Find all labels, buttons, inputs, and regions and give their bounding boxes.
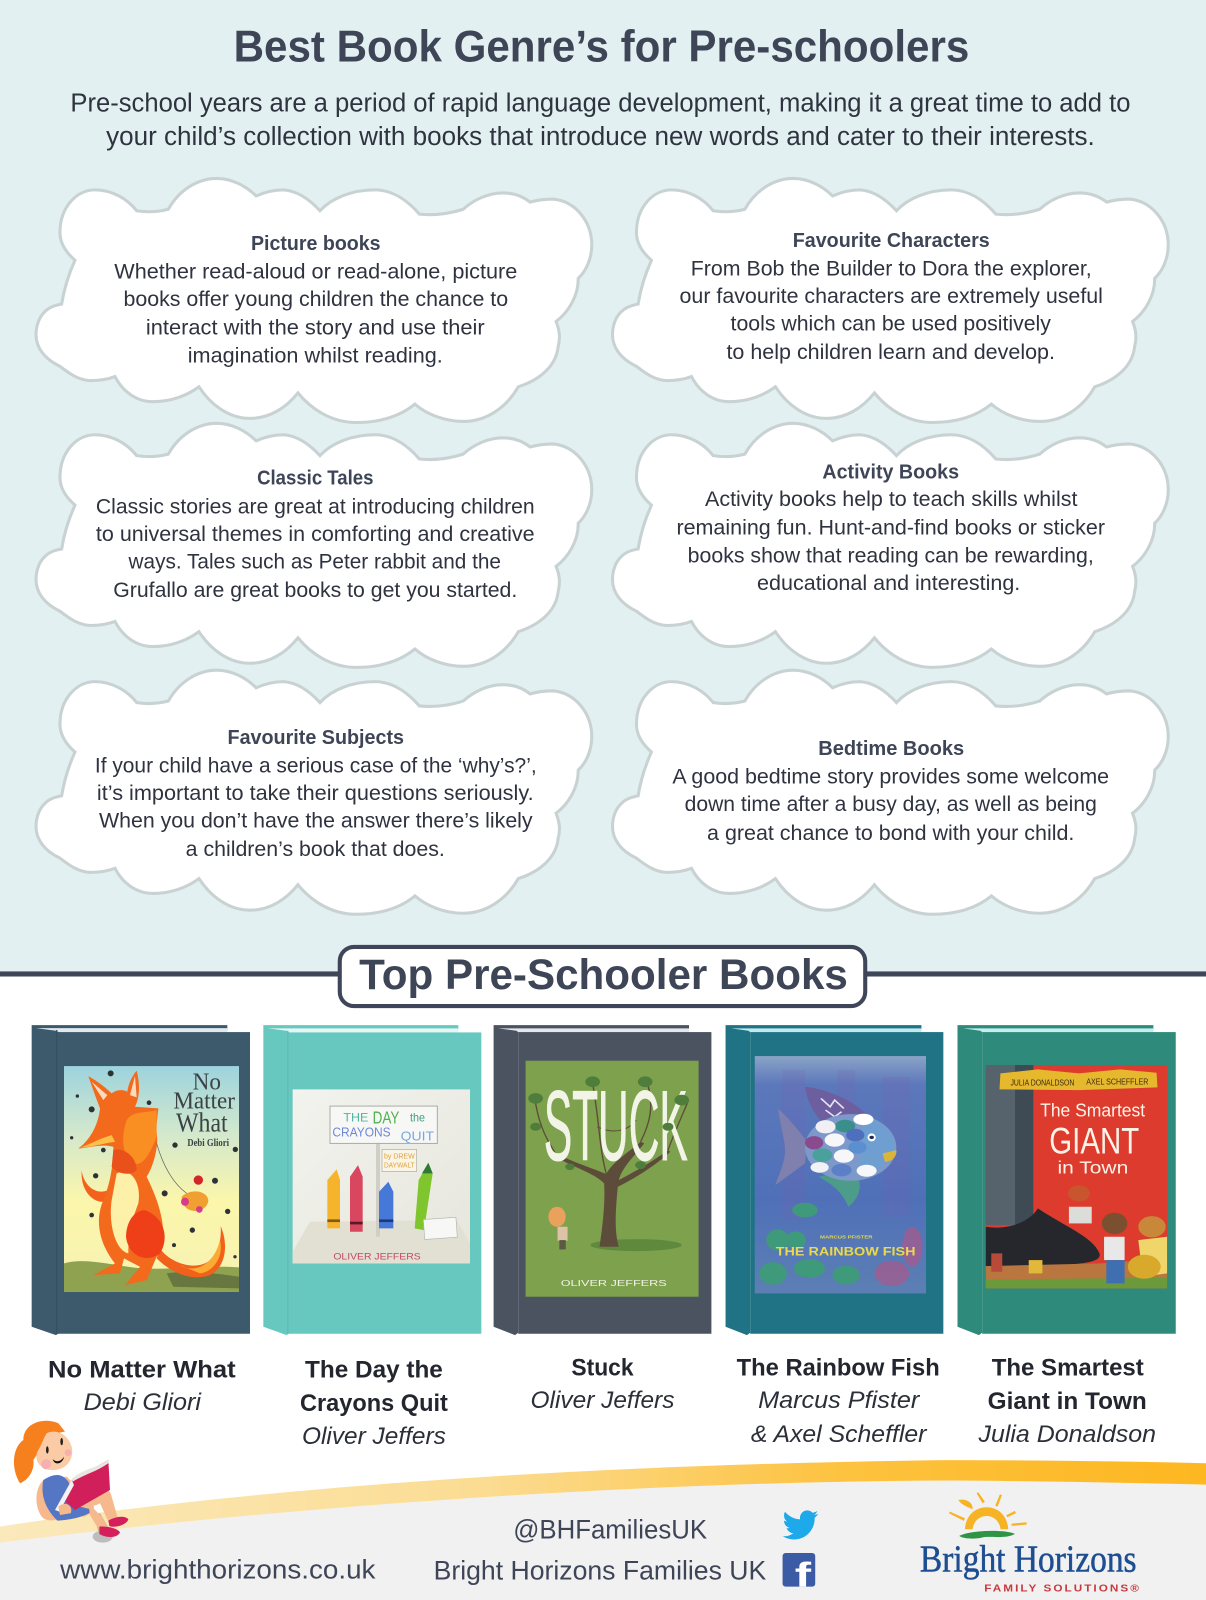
header background [0,0,1206,973]
cover art: giant in town [986,1065,1167,1288]
label: The Rainbow Fish [737,1354,940,1448]
cover art: kangaroo [64,1066,239,1292]
label: The Day the Crayons Quit: Crayons Quit [300,1390,448,1417]
panel: classic tales cloud: to universal themes in comforting and creative [96,523,535,546]
panel: classic tales cloud: Classic Tales [257,468,373,490]
panel: favourite subjects cloud: it’s important to take their questions seriously. [97,782,534,805]
label: The Day the Crayons Quit [300,1356,448,1450]
facebook name: Bright Horizons Families UK [434,1556,766,1586]
cover art: tree: OLIVER JEFFERS [561,1279,667,1289]
cover art: crayons [293,1089,470,1263]
cover art: rainbow fish: THE RAINBOW FISH [776,1245,915,1259]
book: The Smartest Giant in Town [957,1025,1176,1335]
panel: favourite subjects cloud: a children’s book that does. [186,838,445,861]
intro text: your child’s collection with books that introduce new words and cater to their interests. [106,123,1095,151]
label: No Matter What [48,1356,236,1416]
panel: favourite characters cloud: tools which can be used positively [731,313,1051,336]
cover art: giant in town: GIANT [1049,1121,1139,1162]
cover art: kangaroo: What [176,1107,228,1137]
cover art: kangaroo: No [193,1069,221,1095]
cover art: giant in town: The Smartest [1040,1100,1146,1121]
cover art: rainbow fish: MARCUS PFISTER [820,1235,873,1240]
cover art: tree [526,1061,699,1297]
cover art: rainbow fish [755,1056,926,1293]
panel: favourite characters cloud: Favourite Characters [793,230,990,252]
label: The Smartest Giant in Town: The Smartest [992,1354,1144,1381]
panel: bedtime books cloud: A good bedtime story provides some welcome [672,766,1109,789]
panel: classic tales cloud: Grufallo are great books to get you started. [113,579,517,602]
panel: favourite subjects cloud [36,670,592,914]
cover art: crayons: DAYWALT [384,1160,415,1169]
panel: favourite subjects cloud: If your child have a serious case of the ‘why’s?’, [95,754,537,777]
book: The Rainbow Fish [726,1025,943,1335]
panel: picture books cloud: Picture books [251,233,381,255]
panel: activity books cloud: Activity Books [822,462,959,484]
logo: bright horizons: FAMILY SOLUTIONS® [984,1583,1141,1594]
cover art: crayons: DAY [373,1107,400,1127]
cover art: crayons: THE [343,1111,368,1125]
panel: favourite subjects cloud: Favourite Subjects [228,727,404,749]
label: The Rainbow Fish: Marcus Pfister [758,1387,920,1414]
panel: favourite characters cloud [612,178,1168,422]
panel: classic tales cloud: ways. Tales such as Peter rabbit and the [128,550,501,573]
icon: sun [949,1492,1027,1539]
label: Stuck [531,1354,674,1414]
website url: www.brighthorizons.co.uk [59,1554,376,1584]
cover art: giant in town: in Town [1057,1157,1128,1178]
panel: favourite characters cloud: From Bob the Builder to Dora the explorer, [691,258,1092,281]
book: No Matter What [32,1025,250,1335]
panel: activity books cloud: books show that reading can be rewarding, [688,544,1094,567]
cover art: crayons: by DREW [384,1151,415,1160]
label: The Smartest Giant in Town: Giant in Town [988,1388,1147,1415]
twitter handle: @BHFamiliesUK [513,1515,707,1545]
label: The Day the Crayons Quit: The Day the [305,1356,443,1383]
title: Best Book Genre’s for Pre-schoolers [234,20,969,71]
book: Stuck [494,1025,711,1335]
cover art: crayons: CRAYONS [332,1126,391,1140]
panel: picture books cloud: interact with the story and use their [146,317,485,340]
panel: picture books cloud: Whether read-aloud or read-alone, picture [114,261,517,284]
text: STUCK [544,1071,688,1182]
icon: girl reading [14,1421,128,1543]
icon: facebook [783,1553,815,1595]
cover art: giant in town: JULIA DONALDSON [1010,1079,1074,1088]
section heading: top pre-schooler books: Top Pre-Schooler Books [359,951,848,999]
panel: picture books cloud: imagination whilst reading. [188,344,443,367]
footer band [0,1460,1206,1600]
icon: facebook: f [795,1557,812,1595]
label: No Matter What: No Matter What [48,1356,236,1383]
panel: activity books cloud: educational and interesting. [757,572,1020,595]
panel: favourite characters cloud: our favourite characters are extremely useful [680,285,1103,308]
label: The Rainbow Fish: & Axel Scheffler [751,1421,927,1448]
label: Stuck: Stuck [571,1354,634,1381]
cover art: kangaroo: Matter [173,1087,235,1114]
panel: classic tales cloud [36,423,592,667]
icon: twitter bird [783,1510,818,1539]
cover art: giant in town: AXEL SCHEFFLER [1086,1078,1149,1087]
label: The Rainbow Fish: The Rainbow Fish [737,1354,940,1381]
panel: picture books cloud [36,178,592,422]
panel: activity books cloud [612,423,1168,667]
intro text [70,89,1130,151]
label: The Smartest Giant in Town: Julia Donaldson [977,1421,1156,1448]
intro text: Pre-school years are a period of rapid language development, making it a great time to add to [70,89,1130,117]
panel: bedtime books cloud: down time after a busy day, as well as being [685,793,1097,816]
cover art: crayons: the [410,1111,425,1125]
label: The Smartest Giant in Town [977,1354,1156,1448]
book titles [48,1354,1156,1450]
panel: favourite characters cloud: to help children learn and develop. [726,341,1055,364]
section heading: top pre-schooler books [0,947,1206,1006]
cover art: kangaroo: Debi Gliori [187,1138,229,1149]
panel: bedtime books cloud [612,670,1168,914]
panel: picture books cloud: books offer young children the chance to [123,288,508,311]
label: The Day the Crayons Quit: Oliver Jeffers [302,1423,446,1450]
panel: classic tales cloud: Classic stories are great at introducing children [96,495,535,518]
label: Stuck: Oliver Jeffers [531,1387,674,1414]
panel: activity books cloud: Activity books help to teach skills whilst [705,488,1078,511]
logo: bright horizons: Bright Horizons [920,1539,1137,1581]
panel: favourite subjects cloud: When you don’t have the answer there’s likely [99,810,533,833]
book: The Day the Crayons Quit [263,1025,481,1335]
label: No Matter What: Debi Gliori [84,1389,202,1416]
panel: activity books cloud: remaining fun. Hunt-and-find books or sticker [676,517,1105,540]
logo: bright horizons [920,1492,1141,1594]
cover art: crayons: QUIT [401,1129,434,1144]
panel: bedtime books cloud: a great chance to bond with your child. [707,822,1074,845]
cover art: crayons: OLIVER JEFFERS [333,1251,421,1261]
panel: bedtime books cloud: Bedtime Books [818,738,964,760]
